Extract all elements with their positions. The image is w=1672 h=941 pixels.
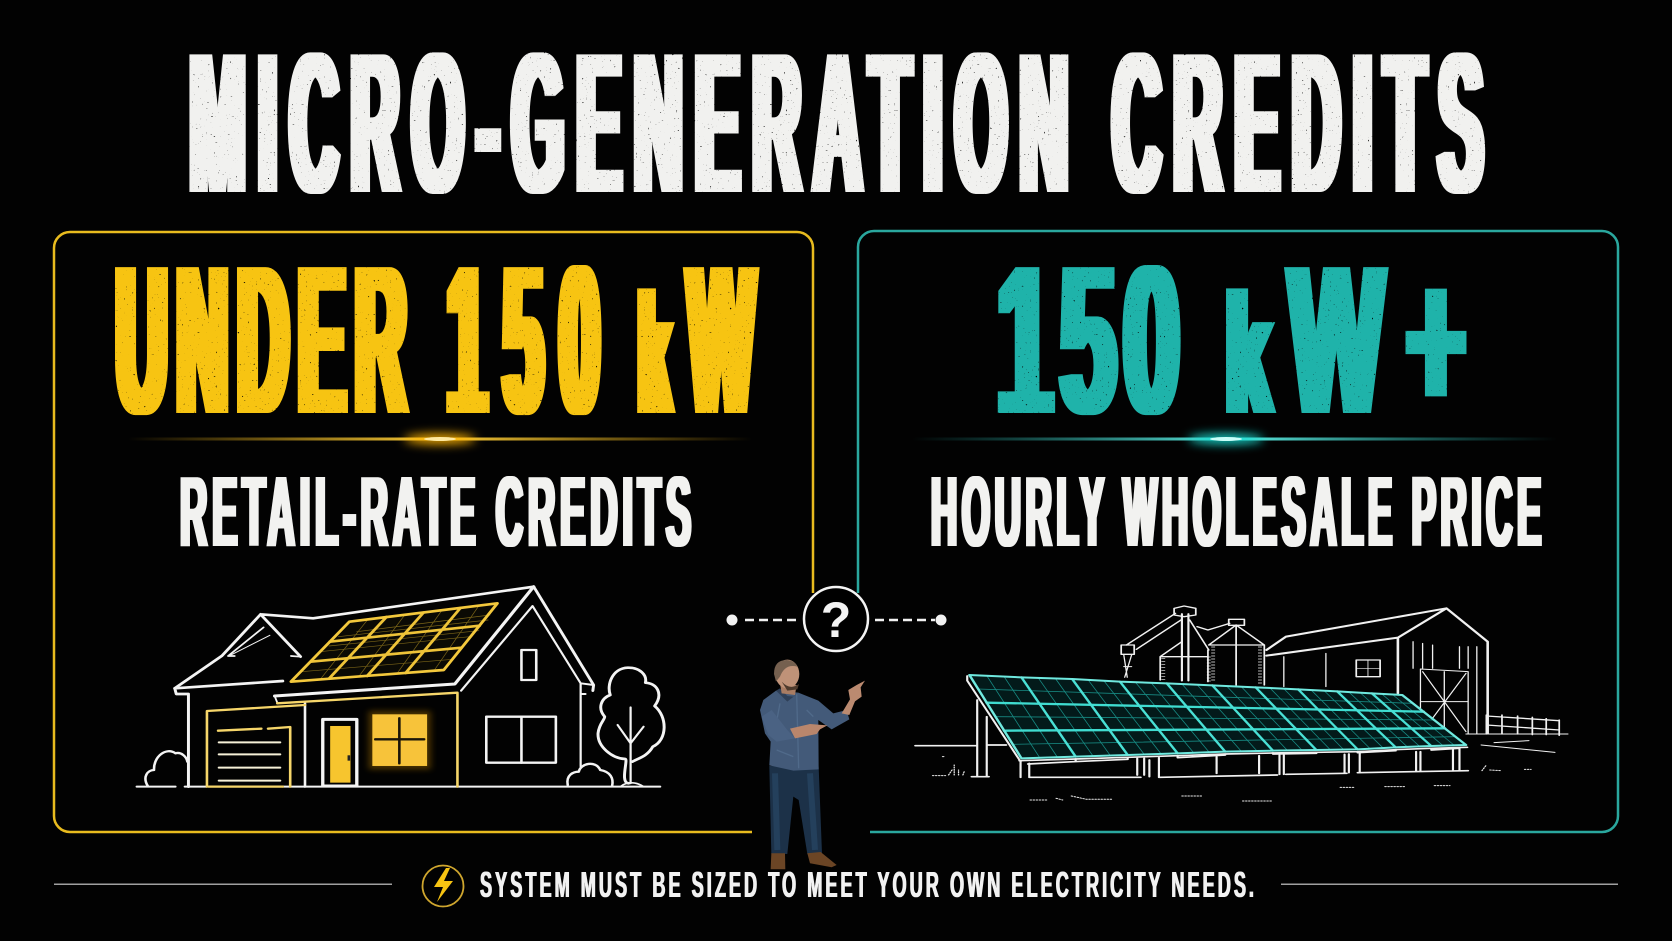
panel: under 150 kW	[54, 222, 813, 832]
front door	[323, 719, 357, 786]
heading: under 150 kW: 150	[447, 222, 653, 459]
icon: lightning bolt	[422, 866, 464, 906]
neck	[780, 683, 797, 695]
panel border: yellow	[54, 232, 813, 832]
grain silos	[1121, 606, 1264, 685]
beard	[782, 682, 799, 691]
shirt	[760, 691, 849, 771]
illustration: house with solar roof	[137, 587, 664, 787]
heading: 150 kW+: 150	[997, 222, 1223, 459]
heading: 150 kW+: W	[1289, 222, 1384, 459]
footer rule right	[1281, 884, 1618, 885]
illustration: farm with solar array	[915, 606, 1568, 801]
glowing divider: teal	[912, 434, 1557, 444]
footer note	[54, 864, 1618, 906]
connector: question mark between panels	[726, 587, 946, 651]
head	[775, 660, 799, 688]
hair	[774, 660, 797, 682]
forearm	[790, 724, 827, 738]
grass tufts	[933, 757, 1531, 801]
heading: 150 kW+: +	[1407, 222, 1465, 459]
dashed connector	[726, 614, 946, 626]
heading: 150 kW+: k	[1226, 258, 1271, 450]
solar panel on roof	[291, 603, 497, 682]
panel border: teal	[858, 231, 1618, 832]
collar	[776, 688, 799, 702]
barn	[1266, 608, 1568, 752]
presenter figure	[760, 660, 865, 869]
text: RETAIL-RATE CREDITS	[180, 456, 696, 568]
array supports and ground	[915, 676, 1468, 777]
heading: under 150 kW: UNDER	[116, 222, 446, 459]
heading: 150 kW+	[997, 222, 1465, 459]
window glow	[369, 711, 431, 769]
heading: under 150 kW	[116, 222, 754, 459]
heading: under 150 kW: W	[688, 222, 754, 459]
heading: under 150 kW: k	[639, 259, 671, 451]
garage and walls	[207, 693, 457, 787]
legs	[769, 766, 822, 854]
shirt folds	[775, 694, 813, 768]
footer rule left	[54, 884, 392, 885]
question mark: ?	[821, 592, 851, 648]
shoes	[771, 852, 837, 869]
question circle	[804, 587, 868, 651]
glowing divider: yellow	[128, 434, 752, 444]
lit window	[372, 714, 427, 766]
solar array	[969, 675, 1466, 758]
raised arm and hand	[842, 681, 865, 715]
panel: 150 kW and over	[858, 222, 1618, 832]
sleeve	[762, 710, 795, 742]
house outline	[137, 587, 664, 787]
